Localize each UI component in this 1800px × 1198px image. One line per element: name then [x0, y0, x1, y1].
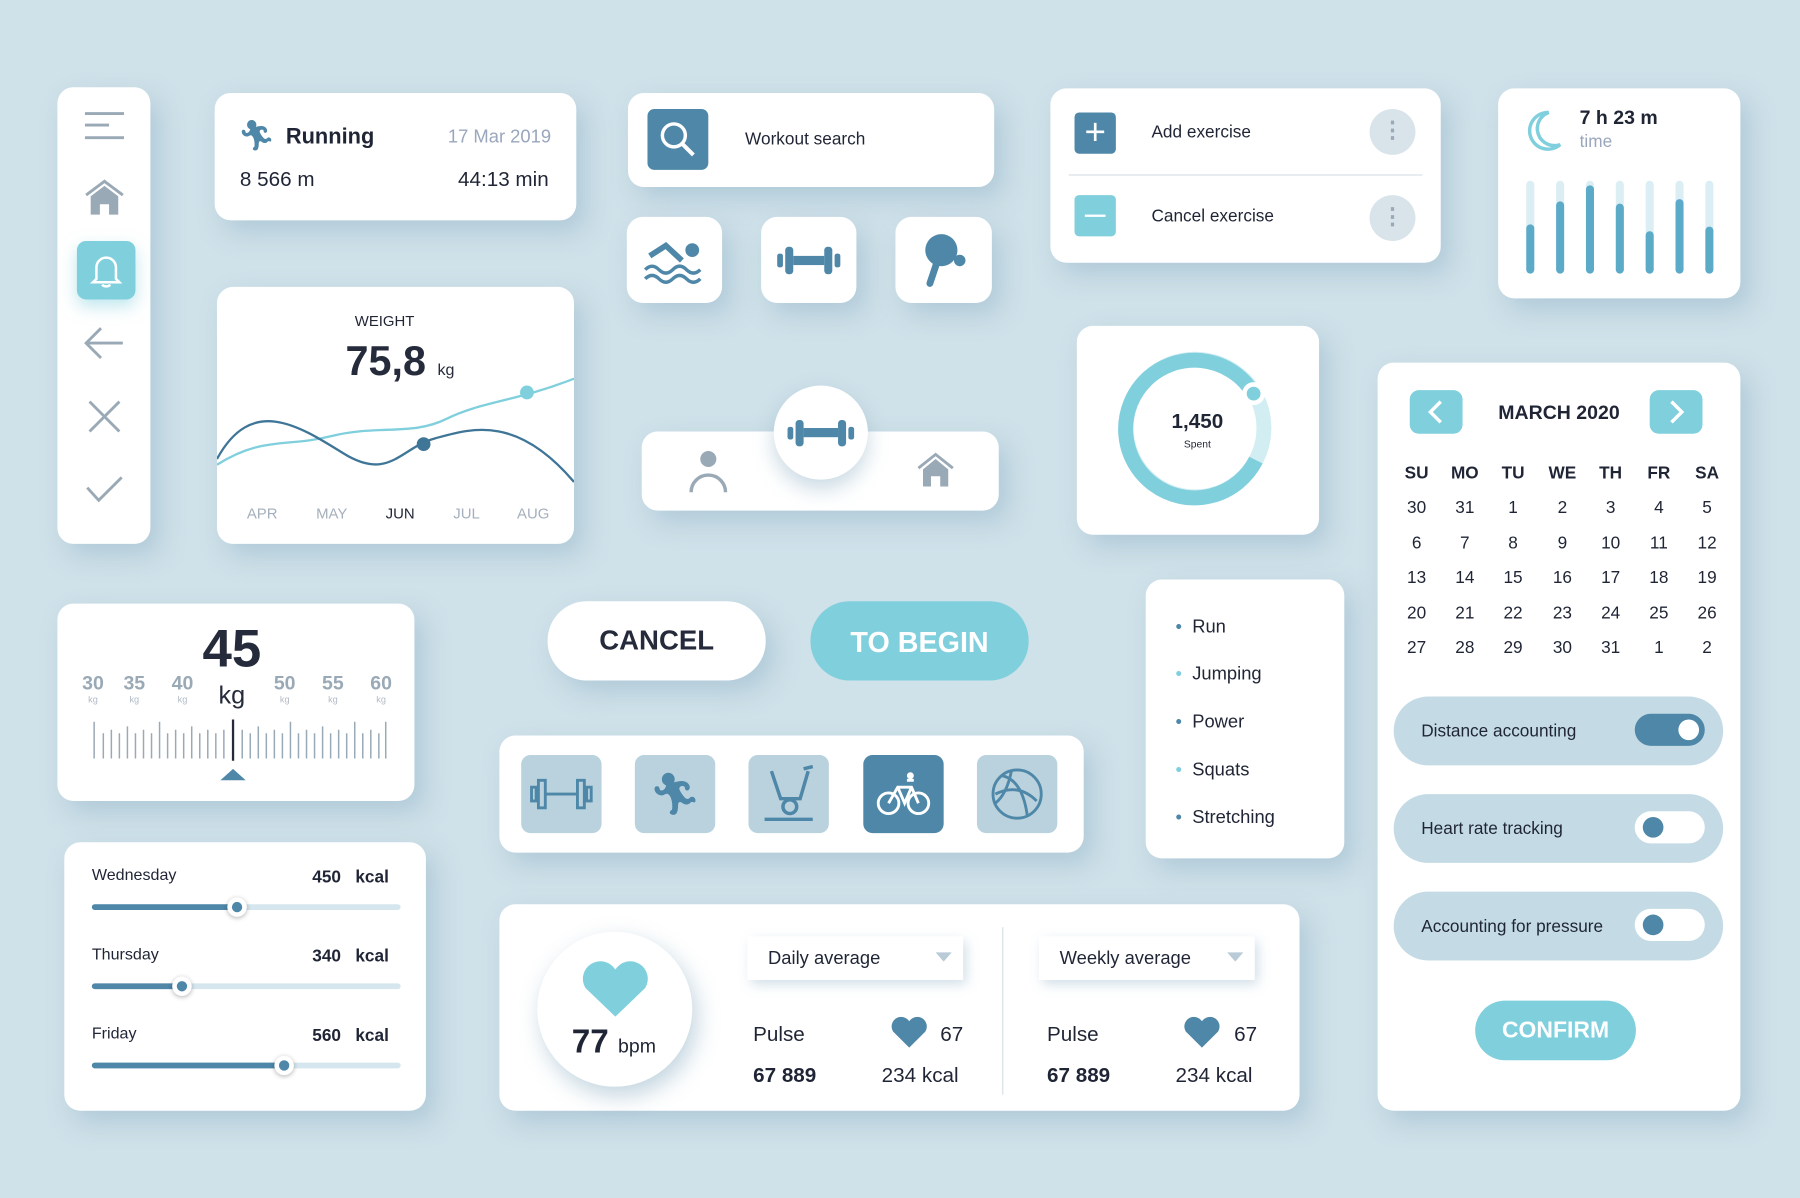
calendar grid: 6 [1412, 533, 1421, 553]
kcal card [64, 842, 426, 1111]
tile: dumbbell [521, 755, 602, 833]
toggle: pressure: Accounting for pressure [1421, 917, 1603, 936]
icon: moon [1528, 110, 1562, 151]
running card: 17 Mar 2019 [448, 127, 551, 147]
calendar grid: 31 [1601, 637, 1620, 657]
exercise list card: • Stretching [1176, 808, 1275, 827]
icon: runner: 🏃︎ [238, 118, 276, 153]
calendar grid: MO [1451, 463, 1479, 483]
calendar grid: TH [1599, 463, 1622, 483]
exercise list card: • Squats [1176, 761, 1249, 780]
scale labels: 40 [172, 673, 194, 695]
weekly average: Weekly average [1060, 949, 1191, 968]
calendar grid: 1 [1508, 497, 1518, 517]
calendar grid: SU [1405, 463, 1429, 483]
kcal card: Friday [92, 1024, 137, 1042]
toggle: heart rate [1394, 794, 1723, 863]
calendar grid: 11 [1650, 533, 1668, 553]
running card: 44:13 min [458, 168, 549, 190]
nav bar [642, 431, 999, 511]
scale labels: 35 [123, 673, 145, 695]
weekly average [1039, 936, 1255, 980]
sleep bars [1526, 180, 1714, 274]
toggle: distance [1394, 697, 1723, 765]
scale labels [82, 673, 392, 780]
icon: home [85, 180, 124, 215]
exercise list card: • Jumping [1176, 664, 1262, 684]
calendar grid: 20 [1407, 603, 1426, 623]
icon: home [918, 452, 954, 486]
calendar grid: 18 [1649, 567, 1668, 587]
kcal card: Thursday [92, 944, 159, 963]
cancel button: CANCEL [599, 625, 714, 656]
confirm button: CONFIRM [1502, 1018, 1609, 1043]
calendar grid: 10 [1601, 533, 1620, 553]
pulse card: 67 [940, 1022, 963, 1045]
weight card [217, 287, 574, 544]
heart circle: 77 bpm [572, 1024, 656, 1060]
pulse card: 67 [1234, 1022, 1257, 1045]
scale labels: kg [129, 694, 139, 704]
add exercise [1075, 112, 1116, 154]
exercise card: Add exercise [1151, 123, 1251, 142]
exercise card: ⋮ [1381, 118, 1404, 143]
tile: bicycle active [863, 755, 944, 833]
icon: check [86, 476, 123, 502]
workout search [628, 93, 994, 187]
running card: Running [286, 125, 374, 149]
scale labels: kg [88, 694, 98, 704]
search button [647, 109, 708, 170]
scale card [57, 604, 414, 801]
cancel button [548, 601, 766, 680]
to begin button: TO BEGIN [850, 627, 989, 659]
icon row card [499, 736, 1084, 853]
heart circle [537, 932, 692, 1087]
calendar card [1378, 363, 1740, 1111]
calendar grid: FR [1647, 463, 1671, 483]
calendar grid: 28 [1455, 637, 1474, 657]
sport icon buttons [626, 216, 1009, 322]
kcal card: 340 kcal [312, 947, 389, 966]
calendar grid: 7 [1460, 533, 1470, 553]
exercise list card [1146, 579, 1344, 858]
pulse card: 234 kcal [1176, 1064, 1253, 1087]
next button [1650, 390, 1702, 434]
running card: 8 566 m [240, 168, 315, 190]
icon: menu [84, 112, 124, 140]
sidebar [57, 87, 150, 544]
kcal card: Wednesday [92, 865, 176, 884]
scale labels: 55 [322, 673, 344, 695]
calendar grid: 25 [1649, 603, 1668, 623]
scale card: 45 [203, 619, 261, 678]
calendar grid: 29 [1503, 637, 1523, 657]
scale labels: kg [280, 694, 290, 704]
pulse card: Pulse [753, 1022, 805, 1045]
weight card: 75,8 kg [346, 337, 454, 384]
weight card: APR MAY JUN JUL AUG [247, 505, 549, 522]
calendar grid: 4 [1654, 497, 1664, 517]
donut card: Spent [1184, 438, 1211, 450]
calendar grid: 19 [1698, 567, 1717, 587]
scale labels: kg [328, 694, 338, 704]
daily average: Daily average [768, 949, 880, 968]
calendar grid: 8 [1508, 533, 1518, 553]
pulse card: 234 kcal [882, 1064, 959, 1087]
weight card: WEIGHT [355, 312, 414, 329]
scale labels: 50 [274, 673, 296, 695]
calendar grid: 5 [1702, 497, 1712, 517]
add exercise: + [1084, 111, 1106, 153]
calendar grid: 2 [1558, 497, 1567, 517]
calendar grid: 1 [1654, 637, 1664, 657]
pulse card: 67 889 [1047, 1064, 1110, 1087]
exercise list card: • Run [1176, 617, 1226, 637]
calendar grid: 30 [1553, 637, 1572, 657]
sleep card: time [1580, 132, 1612, 151]
running card [215, 93, 576, 220]
daily average [747, 936, 963, 980]
exercise card: Cancel exercise [1151, 207, 1274, 226]
calendar grid: 17 [1601, 567, 1620, 587]
tile: runner: 🏃︎ [649, 770, 701, 817]
toggle: heart rate: Heart rate tracking [1421, 819, 1563, 839]
icon: close [88, 400, 120, 432]
scale labels: 60 [370, 673, 392, 695]
confirm button [1475, 1001, 1636, 1060]
calendar grid: 24 [1601, 603, 1621, 623]
calendar grid: TU [1502, 463, 1525, 483]
tile: exercise bike [748, 755, 829, 833]
donut chart [1118, 352, 1272, 506]
calendar grid: 30 [1407, 497, 1426, 517]
sleep card: 7 h 23 m [1580, 107, 1658, 129]
icon: swim [627, 217, 722, 303]
toggle: pressure [1394, 892, 1723, 960]
to begin button [810, 601, 1029, 680]
scale labels: 30 [82, 673, 104, 695]
icon: bell active [77, 241, 135, 299]
calendar grid: 2 [1702, 637, 1712, 657]
tile: volleyball [977, 755, 1057, 833]
calendar grid: 14 [1455, 567, 1475, 587]
nav center button [774, 386, 868, 480]
calendar grid: 15 [1503, 567, 1523, 587]
calendar grid: 26 [1698, 603, 1717, 623]
pulse card [499, 904, 1300, 1111]
weight chart [217, 378, 574, 483]
sleep card [1498, 88, 1740, 298]
calendar grid: 27 [1407, 637, 1426, 657]
tile: runner [635, 755, 715, 833]
calendar grid: 31 [1455, 497, 1474, 517]
workout search: Workout search [745, 130, 865, 149]
calendar grid: SA [1695, 463, 1719, 483]
calendar grid: WE [1549, 463, 1576, 483]
calendar grid: 9 [1558, 533, 1567, 553]
donut card: 1,450 [1171, 410, 1223, 433]
calendar card: MARCH 2020 [1498, 402, 1620, 423]
exercise card: ⋮ [1381, 204, 1404, 230]
toggle: distance: Distance accounting [1421, 722, 1576, 741]
kcal card: 450 kcal [312, 868, 389, 887]
calendar grid: 23 [1553, 603, 1572, 623]
icon: dumbbell [761, 217, 856, 303]
icon: user [689, 451, 728, 492]
calendar grid: 22 [1503, 603, 1523, 623]
calendar grid: 13 [1407, 567, 1426, 587]
cancel exercise [1075, 195, 1116, 236]
scale labels: kg [219, 681, 245, 709]
scale labels: kg [376, 694, 386, 704]
exercise list card: • Power [1176, 713, 1244, 732]
kcal card: 560 kcal [312, 1026, 389, 1045]
icon: back [84, 327, 123, 359]
pulse card: Pulse [1047, 1022, 1099, 1045]
prev button [1410, 390, 1463, 434]
scale labels: kg [178, 694, 187, 704]
exercise card [1050, 88, 1441, 263]
calendar grid: 3 [1606, 497, 1615, 517]
donut card [1077, 326, 1319, 535]
icon: ping pong [895, 217, 992, 303]
calendar grid [1405, 463, 1719, 657]
calendar grid: 21 [1455, 603, 1474, 623]
pulse card: 67 889 [753, 1064, 816, 1087]
calendar grid: 12 [1698, 533, 1717, 553]
calendar grid: 16 [1553, 567, 1572, 587]
